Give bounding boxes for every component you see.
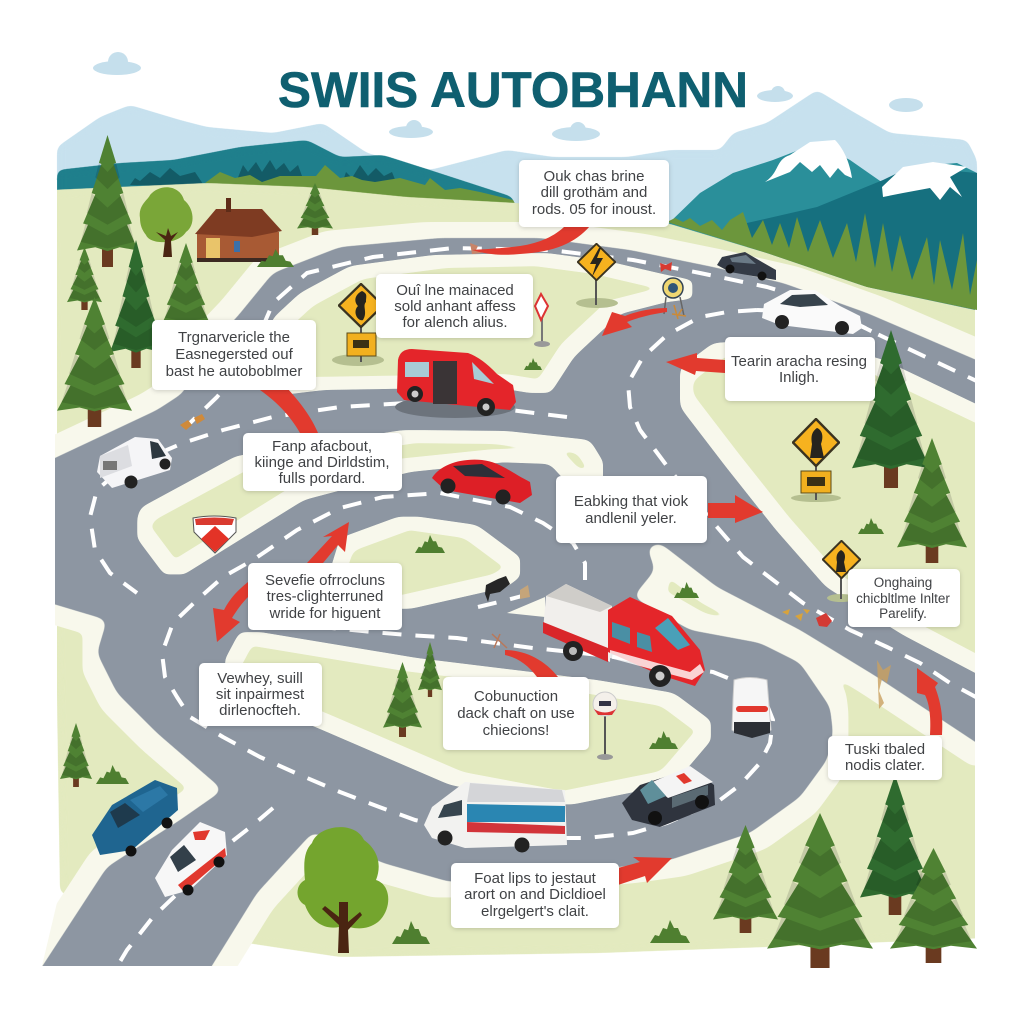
label: lower left (199, 663, 322, 726)
vehicle: white suv (762, 290, 862, 335)
island: centre top (262, 260, 703, 388)
label: left upper: Easnegersted ouf (175, 346, 294, 363)
label: centre left (248, 563, 402, 630)
label: bottom: arort on and Dicldioel (464, 886, 606, 903)
label: maintained (376, 274, 533, 338)
label: left upper (152, 320, 316, 390)
label: construction: Cobunuction (474, 688, 558, 705)
label: top (519, 160, 669, 227)
vehicle: red van (395, 349, 516, 418)
label: middle right: andlenil yeler. (585, 510, 677, 527)
island: small wedge (507, 597, 545, 617)
label: lower right: Tuski tbaled (845, 741, 925, 758)
label: maintained: sold anhant affess (394, 298, 516, 315)
road surface (30, 238, 995, 985)
label: construction: dack chaft on use (457, 705, 575, 722)
label: centre left: Sevefie ofrrocluns (265, 572, 385, 589)
island: left strip (143, 437, 600, 570)
round tree: bottom (298, 827, 388, 953)
label: top: rods. 05 for inoust. (532, 201, 656, 218)
red arrows (213, 226, 942, 885)
label: construction: chiecions! (483, 722, 549, 739)
vehicle: white red car (155, 822, 227, 897)
label: maintained: Ouî lne mainaced (396, 282, 514, 299)
label: middle left: kiinge and Dirldstim, (254, 454, 390, 471)
mountains (57, 90, 977, 312)
bushes (96, 358, 884, 944)
label: right upper: Tearin aracha resing (731, 353, 867, 370)
label: top: dill grothäm and (541, 184, 647, 201)
label: left upper: Trgnarvericle the (178, 329, 290, 346)
label: middle right: Eabking that viok (574, 493, 689, 510)
round tree: hill (140, 187, 193, 257)
label: middle left: fulls pordard. (279, 470, 365, 487)
lane markings (190, 248, 985, 423)
island: right (687, 345, 1005, 678)
title: SWIIS AUTOBHANN (278, 62, 748, 118)
label: lower left: sit inpairmest (216, 686, 305, 703)
vehicle: white van (97, 437, 172, 488)
vehicle: red car (432, 460, 532, 504)
road network (30, 238, 1005, 985)
label: right upper (725, 337, 875, 401)
label: right side: chicbltlme Inlter (856, 591, 950, 606)
house (195, 198, 294, 267)
vehicle: blue car (92, 780, 178, 856)
vehicle: red ambulance truck (543, 584, 705, 687)
debris markers (180, 243, 891, 709)
label: middle right (556, 476, 707, 543)
warning sign: small (823, 541, 860, 602)
label: maintained: for alench alius. (402, 314, 508, 331)
ground (50, 183, 985, 957)
small signs (534, 278, 684, 760)
label: middle left: Fanp afacbout, (272, 438, 372, 455)
warning sign: right (791, 419, 841, 502)
island: inner loop (330, 523, 517, 602)
label: right side: Parelify. (879, 606, 927, 621)
vehicle: dark car (717, 252, 776, 280)
label: right side: Onghaing (874, 575, 932, 590)
warning sign: left (332, 284, 384, 366)
island: lower loop (230, 638, 707, 798)
shield sign (193, 516, 236, 553)
label: lower right (828, 736, 942, 780)
label: lower right: nodis clater. (845, 757, 925, 774)
vehicle: small ambulance (732, 678, 771, 738)
trees (57, 135, 977, 968)
warning sign: lightning (576, 244, 618, 308)
label: construction (443, 677, 589, 750)
label: lower left: dirlenocfteh. (219, 702, 301, 719)
label: left upper: bast he autoboblmer (166, 363, 302, 380)
label: bottom: Foat lips to jestaut (474, 870, 597, 887)
label: lower left: Vewhey, suill (217, 670, 303, 687)
label: centre left: tres-clighterruned (267, 588, 383, 605)
label: middle left (243, 433, 402, 491)
label: bottom: elrgelgert's clait. (481, 903, 589, 920)
tree line: right (667, 212, 977, 310)
label: bottom (451, 863, 619, 928)
label: right upper: Inligh. (779, 369, 819, 386)
clouds (93, 52, 923, 141)
label: right side (848, 569, 960, 627)
vehicle: white truck (424, 782, 567, 852)
label: top: Ouk chas brine (544, 168, 644, 185)
label: centre left: wride for higuent (269, 605, 381, 622)
vehicle: dark van (622, 766, 715, 827)
